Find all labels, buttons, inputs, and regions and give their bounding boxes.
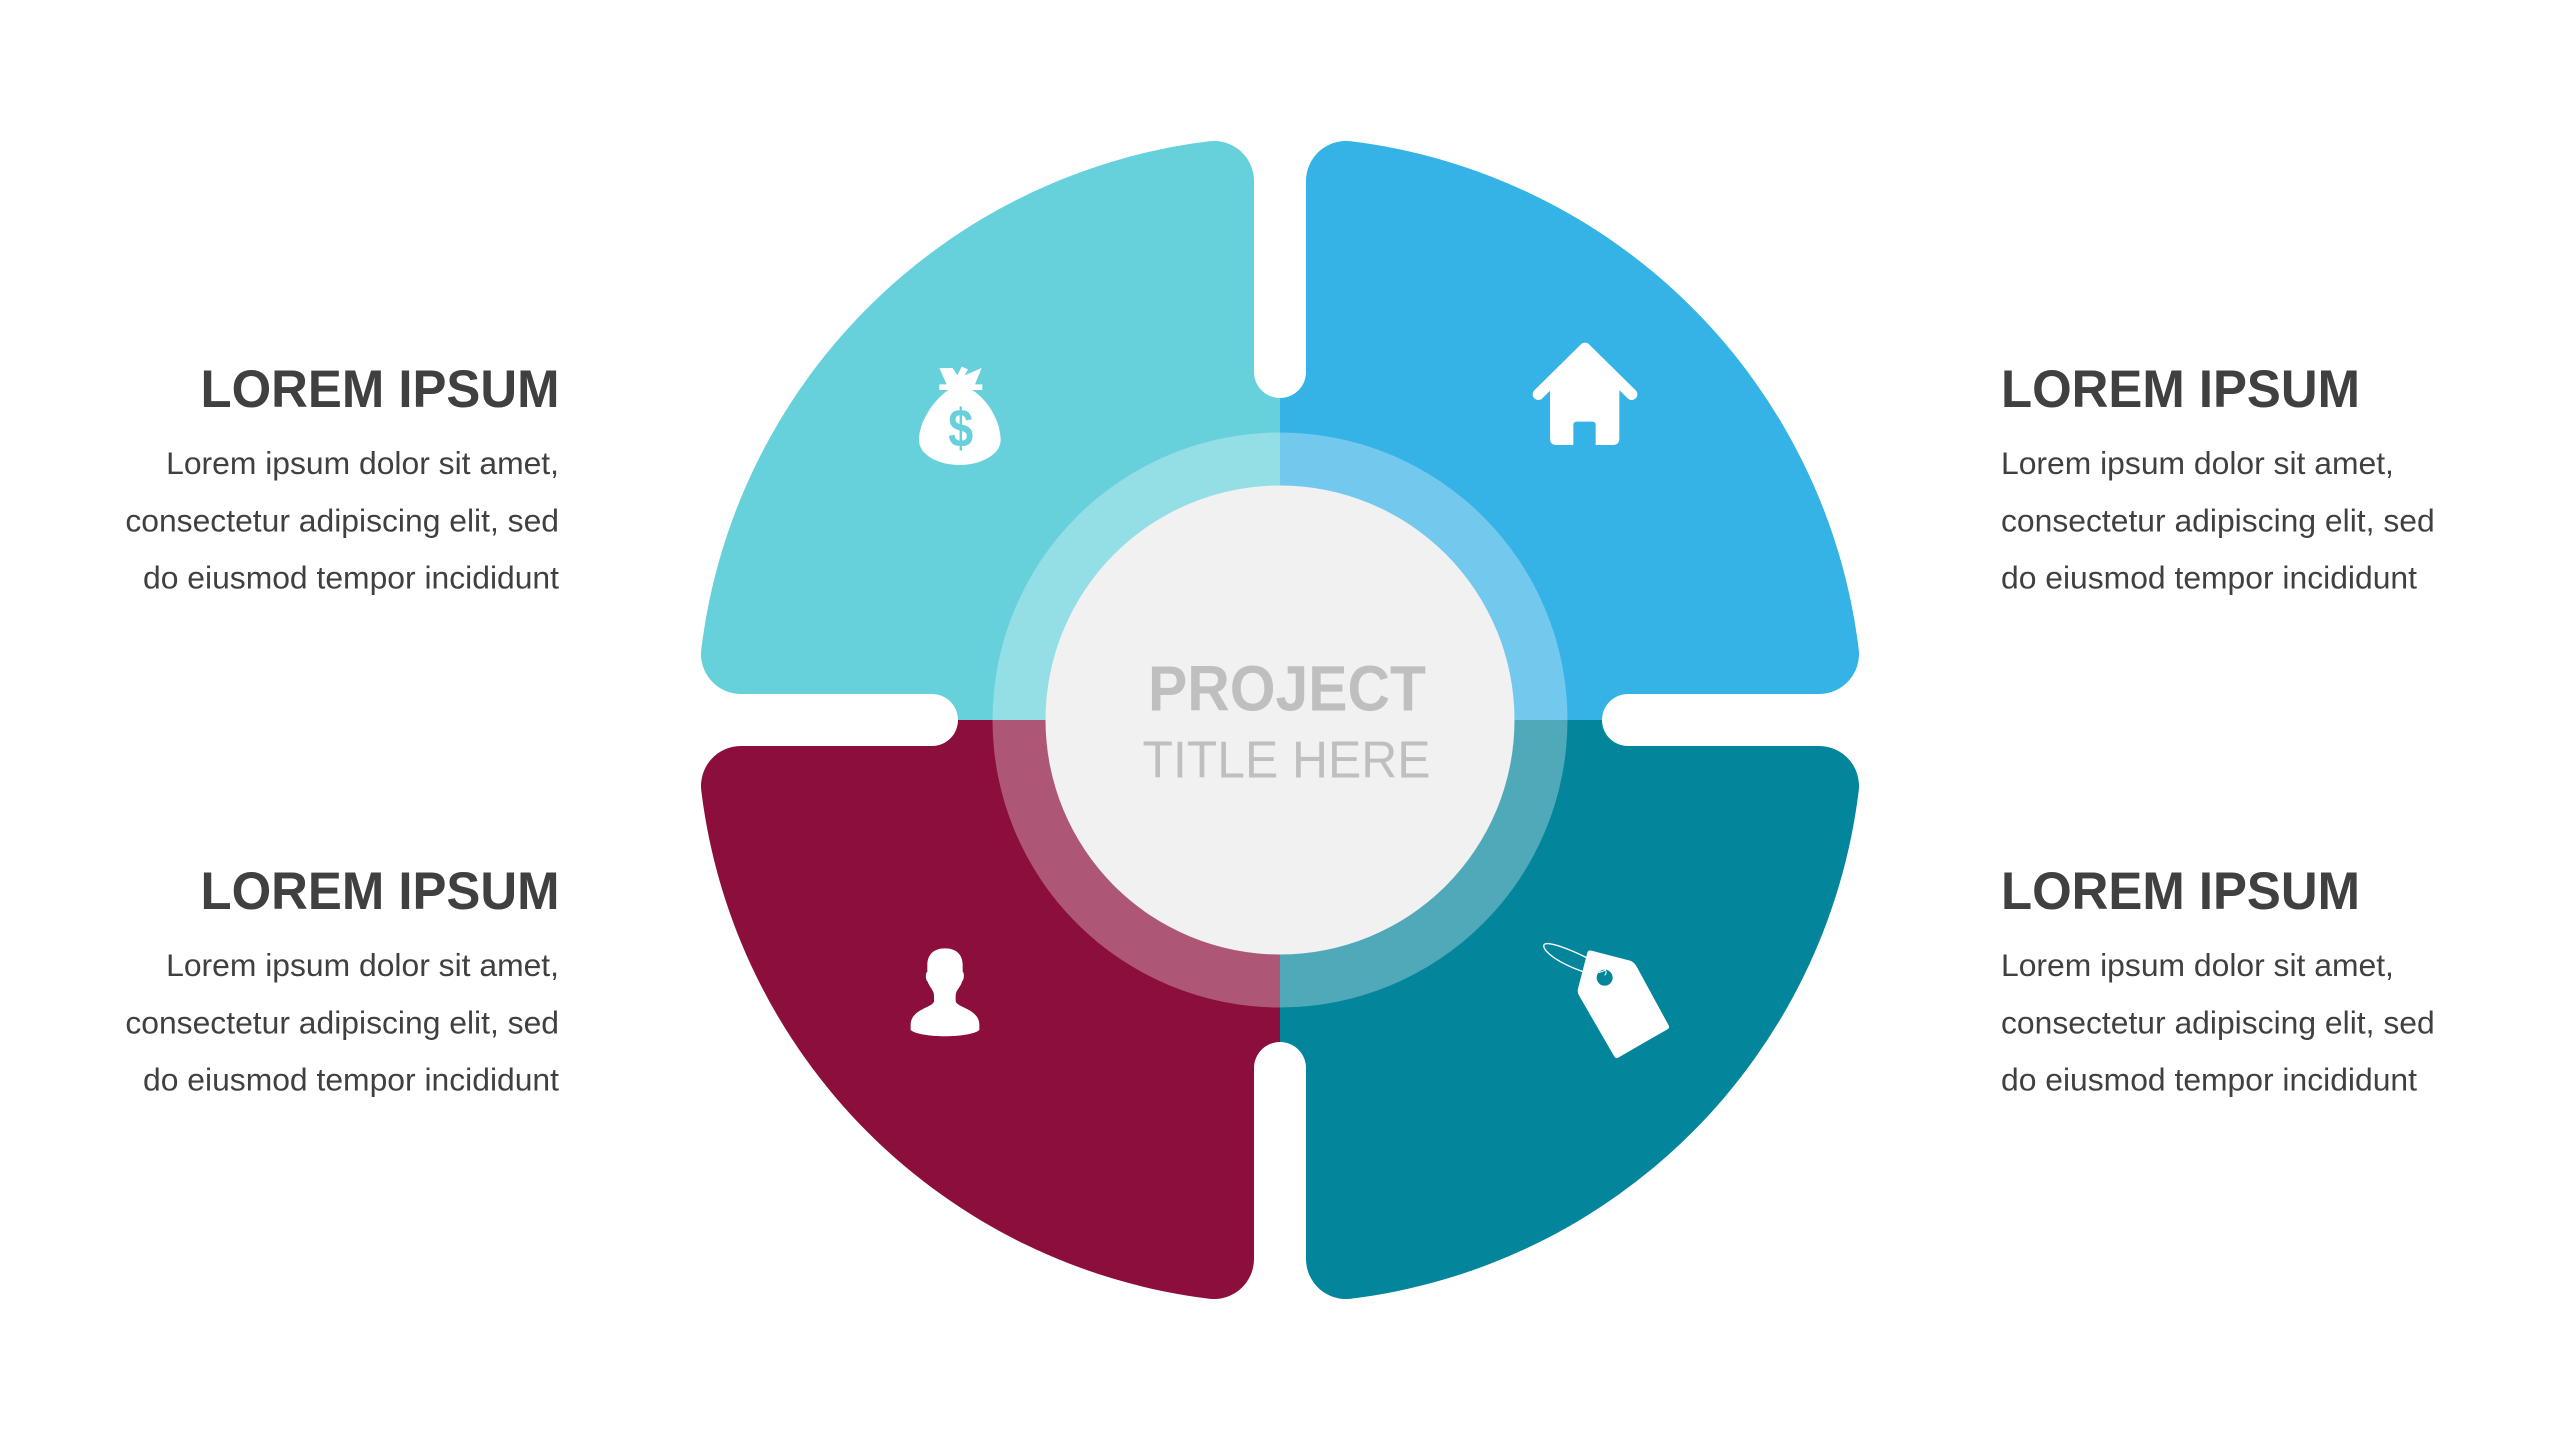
center title: [1142, 652, 1430, 790]
icon: house: [1538, 347, 1632, 445]
segment: bottom-left crimson: [701, 720, 1280, 1299]
body text: Lorem ipsum dolor sit amet,: [2001, 947, 2394, 983]
tag body: [1578, 951, 1669, 1058]
body text: Lorem ipsum dolor sit amet,: [2001, 445, 2394, 481]
icon: price tag: [1544, 944, 1669, 1058]
center circle: [1046, 486, 1514, 954]
icon: money bag: [919, 367, 1001, 465]
body text: do eiusmod tempor incididunt: [2001, 1062, 2417, 1098]
text block: bottom right: [2001, 862, 2435, 1098]
body text: consectetur adipiscing elit, sed: [125, 502, 559, 538]
body text: Lorem ipsum dolor sit amet,: [166, 947, 559, 983]
heading: LOREM IPSUM: [2001, 360, 2360, 419]
segment: top-left teal: [701, 141, 1280, 720]
segment: bottom-right dark teal: [1280, 720, 1859, 1299]
roof: [1538, 348, 1632, 394]
heading: LOREM IPSUM: [2001, 862, 2360, 921]
house body: [1550, 347, 1619, 445]
segment: top-right blue: [1280, 141, 1859, 720]
bag shape: [919, 367, 1001, 465]
text block: top left: [125, 360, 560, 596]
body text: do eiusmod tempor incididunt: [143, 560, 559, 596]
text block: bottom left: [125, 862, 560, 1098]
title line 2: TITLE HERE: [1142, 732, 1430, 790]
body text: do eiusmod tempor incididunt: [143, 1062, 559, 1098]
body text: Lorem ipsum dolor sit amet,: [166, 445, 559, 481]
body text: consectetur adipiscing elit, sed: [2001, 1004, 2435, 1040]
icon: person: [911, 948, 979, 1036]
text block: top right: [2001, 360, 2435, 596]
body text: consectetur adipiscing elit, sed: [2001, 502, 2435, 538]
dollar sign: $: [948, 399, 973, 459]
body text: do eiusmod tempor incididunt: [2001, 560, 2417, 596]
heading: LOREM IPSUM: [200, 862, 560, 921]
heading: LOREM IPSUM: [200, 360, 560, 419]
tag string: [1544, 944, 1587, 972]
tag hole: [1597, 970, 1613, 986]
title line 1: PROJECT: [1148, 652, 1426, 724]
body text: consectetur adipiscing elit, sed: [125, 1004, 559, 1040]
translucent ring: [992, 432, 1568, 1008]
string through hole: [1599, 970, 1606, 975]
circular diagram: [701, 141, 1859, 1299]
